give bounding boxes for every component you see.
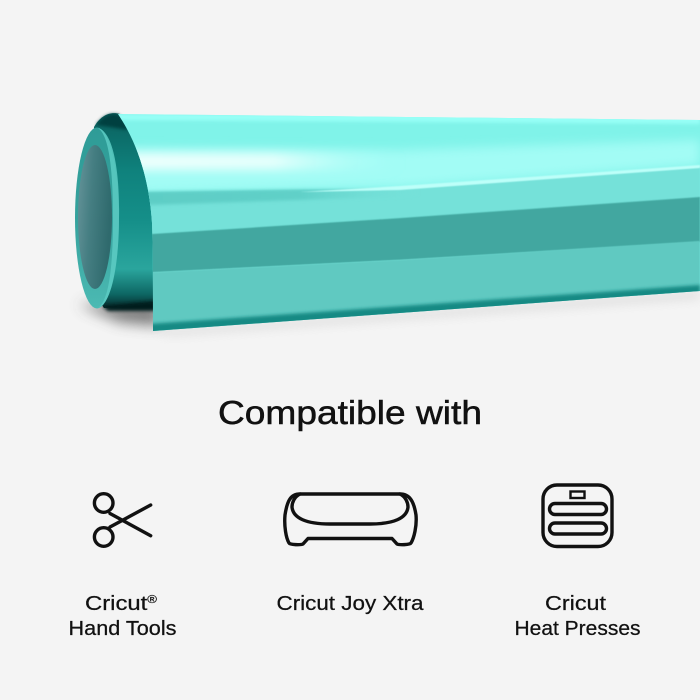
lower band: [120, 241, 700, 335]
label: Cricut Hand Tools: ®: [147, 594, 157, 606]
title: Compatible with: [218, 394, 482, 431]
upper glow band: [120, 140, 700, 194]
icon: heat press: [543, 485, 612, 546]
label: Cricut Joy Xtra: Cricut Joy Xtra: [276, 593, 424, 615]
bottom edge shade: [153, 283, 700, 331]
roll back wrap: [93, 113, 170, 308]
label: Cricut Hand Tools: [68, 593, 176, 640]
floor shadow: [78, 304, 160, 326]
mid band shade: [148, 188, 348, 206]
sheet base: [100, 110, 700, 335]
icon: Cricut Joy Xtra machine: [285, 494, 416, 545]
roll end rim: [75, 128, 119, 308]
dark fold at bottom: [102, 300, 165, 311]
white flare: [120, 153, 400, 170]
roll inner hole: [78, 145, 112, 289]
label: Cricut Heat Presses: [514, 593, 640, 640]
dark band: [120, 197, 700, 274]
vinyl roll illustration: [75, 110, 700, 336]
label: Cricut Heat Presses: Cricut: [545, 593, 607, 615]
label: Cricut Heat Presses: Heat Presses: [514, 618, 640, 640]
icon: scissors: [94, 494, 151, 546]
label: Cricut Hand Tools: Hand Tools: [68, 618, 176, 640]
top highlight: [110, 114, 700, 124]
vinyl sheet: [100, 110, 700, 336]
mid band: [120, 167, 700, 236]
thin highlight line: [300, 165, 700, 192]
label: Cricut Hand Tools: Cricut: [85, 593, 137, 615]
dark fold at top: [96, 114, 128, 130]
